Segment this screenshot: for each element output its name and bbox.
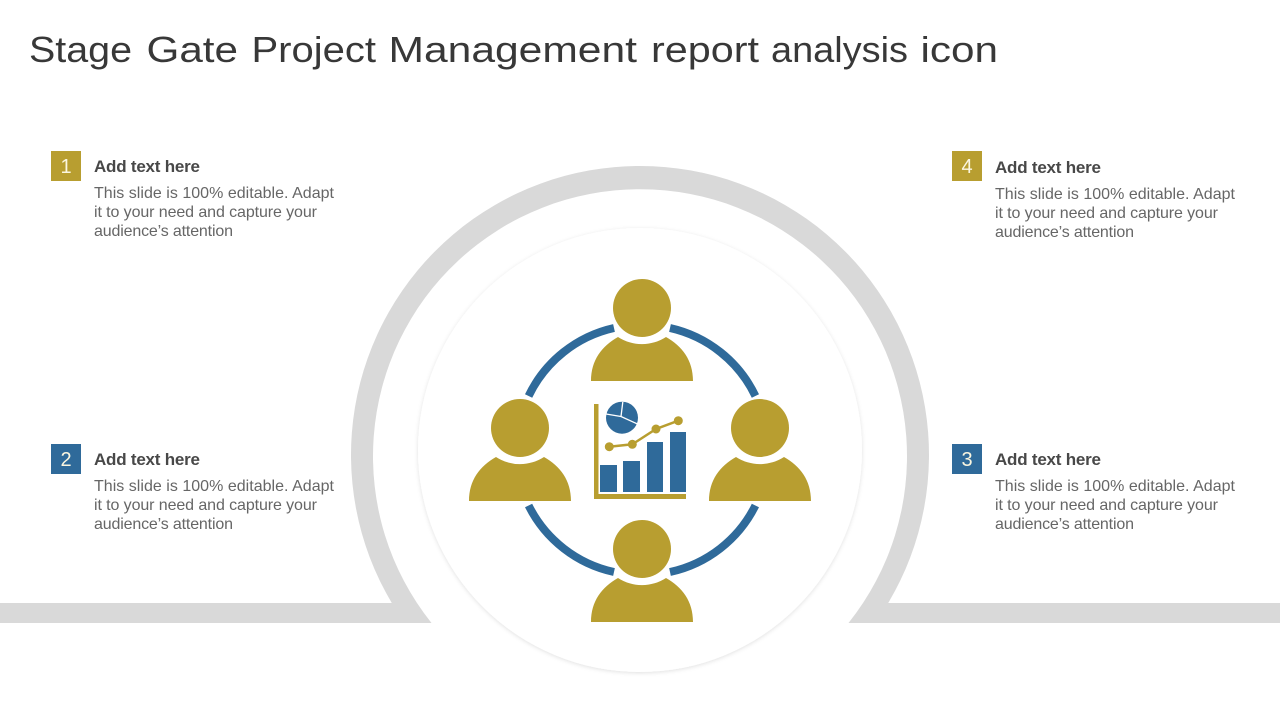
connecting arc: bottom right <box>670 506 755 572</box>
icon: person right <box>709 399 811 501</box>
body text 3: it to your need and capture your <box>995 497 1219 514</box>
heading 3: Add text here <box>995 450 1101 469</box>
title: Gate <box>146 29 238 70</box>
heading 2: Add text here <box>94 450 200 469</box>
body text 1 <box>94 185 335 240</box>
icon: person top <box>591 279 693 381</box>
body text 2 <box>94 478 335 533</box>
pie chart <box>606 402 638 434</box>
connecting arc: bottom left <box>529 506 614 572</box>
icon: person left <box>469 399 571 501</box>
body text 2: This slide is 100% editable. Adapt <box>94 478 335 495</box>
icon: person bottom <box>591 520 693 622</box>
grey ring with baseline bars <box>0 166 1280 623</box>
title: analysis <box>771 29 908 70</box>
number badge 2 <box>51 444 81 474</box>
heading 1: Add text here <box>94 157 200 176</box>
title: report <box>651 29 759 70</box>
central team icon <box>469 279 811 622</box>
title <box>29 29 998 70</box>
connecting arc: top left <box>529 328 614 396</box>
number badge 1 <box>51 151 81 181</box>
item 2 <box>51 444 335 533</box>
item 3 <box>952 444 1236 533</box>
body text 1: This slide is 100% editable. Adapt <box>94 185 335 202</box>
body text 3: This slide is 100% editable. Adapt <box>995 478 1236 495</box>
body text 3: audience’s attention <box>995 516 1134 533</box>
title: Project <box>252 29 376 70</box>
icon: report chart <box>594 402 686 499</box>
body text 2: it to your need and capture your <box>94 497 318 514</box>
body text 4: audience’s attention <box>995 224 1134 241</box>
body text 1: it to your need and capture your <box>94 204 318 221</box>
body text 4: This slide is 100% editable. Adapt <box>995 186 1236 203</box>
body text 3 <box>995 478 1236 533</box>
item 1 <box>51 151 335 240</box>
body text 2: audience’s attention <box>94 516 233 533</box>
body text 1: audience’s attention <box>94 223 233 240</box>
number badge 2: 2 <box>60 449 72 471</box>
item 4 <box>952 151 1236 241</box>
title: Management <box>388 29 637 70</box>
number badge 3: 3 <box>961 449 973 471</box>
chart axes <box>594 404 686 499</box>
number badge 3 <box>952 444 982 474</box>
number badge 4 <box>952 151 982 181</box>
heading 4: Add text here <box>995 158 1101 177</box>
body text 4 <box>995 186 1236 241</box>
title: icon <box>920 29 998 70</box>
inner white circle <box>418 228 862 672</box>
trend line <box>605 416 683 451</box>
title: Stage <box>29 29 132 70</box>
connecting arc: top right <box>670 328 755 396</box>
body text 4: it to your need and capture your <box>995 205 1219 222</box>
number badge 4: 4 <box>961 156 973 178</box>
number badge 1: 1 <box>60 156 72 178</box>
chart bars <box>600 432 686 492</box>
